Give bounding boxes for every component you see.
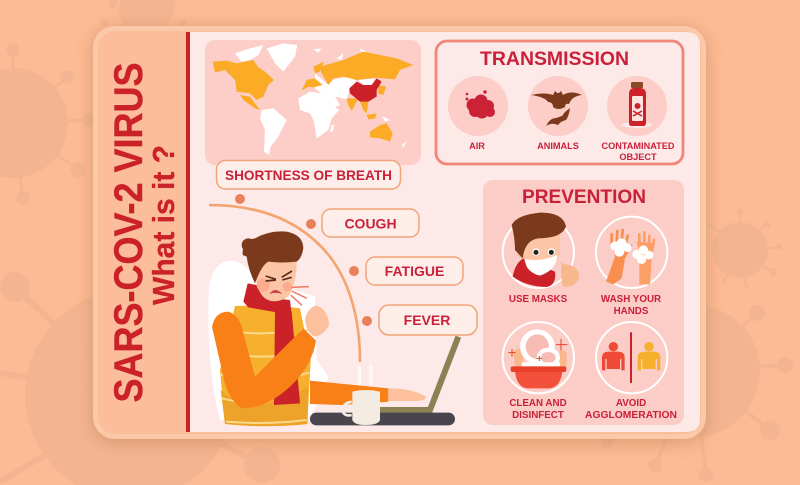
- title: vertical heading: What is it ?: [146, 145, 181, 305]
- panel: transmission: [436, 41, 683, 164]
- icon: wash your hands: [596, 217, 667, 288]
- label: use masks: USE MASKS: [509, 294, 568, 305]
- label: clean and disinfect: DISINFECT: [512, 410, 564, 421]
- symptom: cough: COUGH: [344, 216, 397, 232]
- label: air: AIR: [469, 141, 485, 151]
- label: clean and disinfect: [509, 398, 567, 421]
- label: avoid agglomeration: [585, 398, 677, 421]
- illustration: coughing man: [208, 231, 426, 426]
- main card: [93, 26, 706, 439]
- label: avoid agglomeration: AVOID: [616, 398, 646, 409]
- label: wash your hands: WASH YOUR: [601, 294, 661, 305]
- panel: prevention: [483, 180, 684, 425]
- heading: prevention: PREVENTION: [522, 186, 646, 208]
- icon: clean and disinfect: [503, 322, 574, 393]
- laptop: [310, 337, 458, 425]
- label: avoid agglomeration: AGGLOMERATION: [585, 410, 677, 421]
- icon: air: [448, 76, 508, 136]
- symptom arc: [209, 205, 360, 362]
- heading: transmission: TRANSMISSION: [480, 48, 629, 70]
- title: vertical heading: [107, 62, 181, 402]
- label: wash your hands: HANDS: [614, 306, 649, 317]
- symptom: cough: [306, 209, 419, 237]
- symptom: fatigue: FATIGUE: [385, 263, 444, 279]
- symptom: fever: [362, 305, 477, 335]
- label: clean and disinfect: CLEAN AND: [509, 398, 567, 409]
- symptom: fever: FEVER: [404, 312, 450, 328]
- icon: animals (bats): [528, 76, 588, 136]
- label: contaminated object: CONTAMINATED: [602, 141, 675, 151]
- panel: world map: [205, 40, 421, 165]
- label: contaminated object: OBJECT: [619, 152, 657, 162]
- symptom: shortness of breath: [216, 160, 400, 204]
- coffee cup: [343, 365, 380, 425]
- icon: use masks: [503, 213, 579, 288]
- symptom: shortness of breath: SHORTNESS OF BREATH: [225, 167, 392, 183]
- label: animals: ANIMALS: [537, 141, 579, 151]
- label: wash your hands: [601, 294, 661, 317]
- title: vertical heading: SARS-COV-2 VIRUS: [107, 62, 151, 402]
- label: contaminated object: [602, 141, 675, 162]
- icon: avoid agglomeration: [596, 322, 667, 393]
- icon: contaminated object bottle: [607, 76, 667, 136]
- symptom: fatigue: [349, 257, 463, 285]
